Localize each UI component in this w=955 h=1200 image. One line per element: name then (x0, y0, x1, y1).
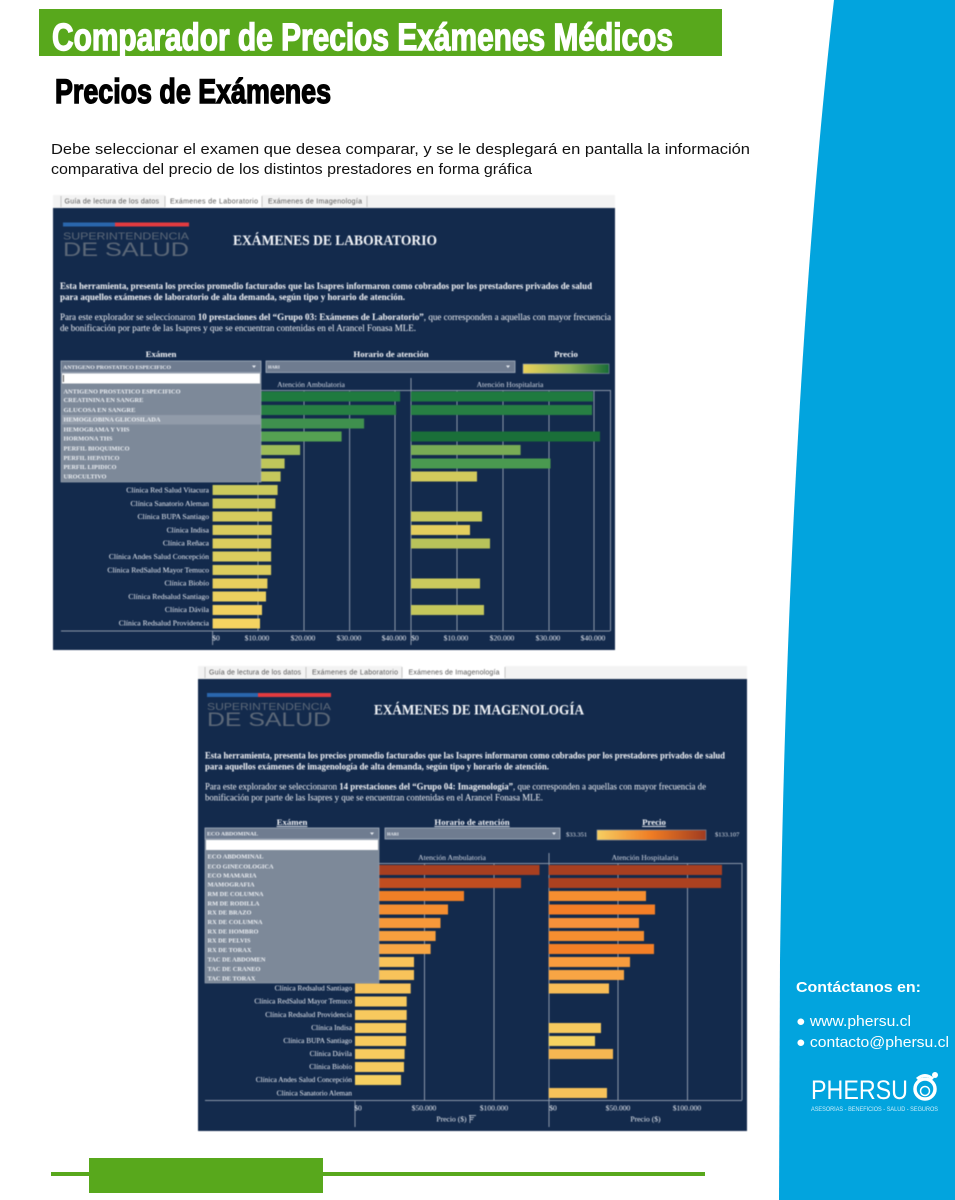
title banner: Comparador de Precios Exámenes Médicos (52, 17, 673, 59)
provider labels: Clínica Indisa (167, 526, 210, 534)
axis labels: $0 (411, 634, 419, 642)
axis labels: $30.000 (337, 634, 362, 642)
examen dropdown: RX DE HOMBRO (208, 928, 258, 936)
examen dropdown: HORMONA THS (64, 436, 113, 442)
description text: Esta herramienta, presenta los precios promedio facturados que las Isapres informaron como cobrados por los prestadores privados de salud (60, 281, 592, 291)
tabs: imagenología dashboard: Exámenes de Imagenología (408, 670, 500, 676)
logo: PHERSU: PHERSU (811, 1075, 908, 1105)
horario selector: HARI (268, 364, 280, 370)
icon: sort marker (469, 1115, 476, 1123)
provider labels: Clínica Redsalud Santiago (128, 592, 209, 601)
provider labels (107, 486, 210, 628)
examen dropdown (205, 828, 379, 983)
provider labels: Clínica Redsalud Providencia (119, 618, 210, 628)
logo: Superintendencia de Salud: SUPERINTENDENCIA (207, 701, 331, 713)
panel: exámenes de laboratorio (53, 195, 615, 650)
precio legend (523, 364, 609, 374)
examen dropdown: TAC DE ABDOMEN (208, 956, 266, 964)
provider labels: Clínica Red Salud Vitacura (126, 486, 210, 494)
examen dropdown: TAC DE CRANEO (208, 966, 260, 973)
axis labels (354, 1104, 701, 1124)
provider labels: Clínica RedSalud Mayor Temuco (107, 566, 209, 574)
provider labels: Clínica Biobío (309, 1062, 352, 1071)
horario selector (266, 361, 515, 372)
horario selector (385, 828, 560, 839)
contact block: ● contacto@phersu.cl (796, 1034, 949, 1051)
provider labels: Clínica BUPA Santiago (138, 512, 209, 521)
axis labels: Precio ($) (436, 1114, 467, 1124)
sidebar: blue curved band (779, 0, 955, 1200)
logo: PHERSU (811, 1072, 938, 1113)
description text (205, 750, 725, 802)
axis labels: $100.000 (673, 1104, 701, 1112)
examen dropdown: ECO MAMARIA (208, 872, 257, 880)
panel: exámenes de imagenología (198, 666, 747, 1131)
description text: bonificación por parte de las Isapres y que se encuentran contenidas en el Arancel Fonasa MLE. (205, 792, 543, 802)
axis labels: $20.000 (291, 634, 316, 642)
description text (60, 281, 611, 333)
column headers: Atención Ambulatoria (277, 380, 345, 389)
description text: Para este explorador se seleccionaron 14 prestaciones del “Grupo 04: Imagenología”, que corresponden a aquellas con mayor frecuencia de (205, 782, 706, 792)
provider labels: Clínica Redsalud Providencia (265, 1010, 353, 1019)
examen dropdown: RM DE COLUMNA (208, 891, 264, 898)
logo: Superintendencia de Salud: DE SALUD (207, 710, 331, 731)
contact block: ● www.phersu.cl (796, 1013, 911, 1030)
horario selector: HARI (387, 832, 399, 836)
description text: Para este explorador se seleccionaron 10 prestaciones del “Grupo 03: Exámenes de Laboratorio”, que corresponden a aquellas con mayor frecuencia (60, 312, 611, 322)
axis labels (212, 634, 606, 642)
axis labels: $30.000 (536, 634, 561, 642)
logo: Superintendencia de Salud (63, 222, 189, 261)
bar chart: atención hospitalaria (549, 865, 722, 1098)
filter headers (146, 349, 578, 359)
examen dropdown: ECO ABDOMINAL (207, 832, 259, 838)
examen dropdown: RX DE BRAZO (208, 910, 252, 916)
axis labels: $40.000 (581, 634, 606, 642)
provider labels: Clínica Dávila (310, 1049, 353, 1058)
provider labels: Clínica Reñaca (163, 538, 210, 548)
examen dropdown: ANTIGENO PROSTATICO ESPECIFICO (63, 366, 171, 371)
examen dropdown: RX DE PELVIS (208, 938, 251, 944)
examen dropdown: PERFIL LIPIDICO (64, 464, 116, 471)
bar chart: atención hospitalaria (411, 392, 600, 615)
precio legend (566, 830, 740, 840)
dashboard title: EXÁMENES DE LABORATORIO (233, 232, 437, 249)
icon: phersu spiral (915, 1072, 938, 1099)
examen dropdown: TAC DE TORAX (208, 976, 256, 982)
provider labels: Clínica Indisa (311, 1023, 353, 1032)
tabs: imagenología dashboard (205, 666, 505, 679)
column headers: Atención Ambulatoria (418, 853, 486, 862)
intro text: comparativa del precio de los distintos prestadores en forma gráfica (51, 162, 533, 178)
description text: de bonificación por parte de las Isapres y que se encuentran contenidas en el Arancel Fonasa MLE. (60, 323, 416, 333)
filter headers: Precio (642, 817, 666, 827)
axis labels: $20.000 (490, 634, 515, 642)
examen dropdown: RX DE COLUMNA (208, 919, 263, 926)
axis labels: $50.000 (412, 1104, 437, 1112)
provider labels: Clínica RedSalud Mayor Temuco (254, 996, 352, 1006)
axis labels: $100.000 (480, 1104, 508, 1112)
axis labels: $0 (549, 1104, 557, 1112)
examen dropdown: RM DE RODILLA (208, 900, 260, 908)
provider labels: Clínica BUPA Santiago (283, 1036, 352, 1045)
provider labels (254, 984, 353, 1098)
examen dropdown: ECO ABDOMINAL (208, 854, 264, 860)
axis labels: $40.000 (382, 634, 407, 642)
axis labels: $0 (354, 1104, 362, 1112)
description text: para aquellos exámenes de laboratorio de alta demanda, según tipo y horario de atención. (60, 292, 405, 302)
axis labels: $50.000 (606, 1104, 631, 1112)
provider labels: Clínica Sanatorio Aleman (277, 1088, 352, 1098)
examen dropdown: MAMOGRAFIA (208, 882, 255, 888)
column headers (418, 853, 679, 862)
provider labels: Clínica Redsalud Santiago (275, 984, 352, 992)
axis labels: $0 (212, 634, 220, 642)
description text: Esta herramienta, presenta los precios promedio facturados que las Isapres informaron como cobrados por los prestadores privados de salud (205, 750, 725, 760)
examen dropdown: CREATININA EN SANGRE (64, 397, 144, 404)
heading: Precios de Exámenes: Precios de Exámenes (55, 73, 331, 111)
tabs: laboratorio dashboard: Exámenes de Imagenología (268, 198, 362, 206)
provider labels: Clínica Dávila (165, 605, 210, 614)
examen dropdown: UROCULTIVO (64, 474, 106, 480)
examen dropdown: ANTIGENO PROSTATICO ESPECIFICO (64, 388, 180, 396)
tabs: laboratorio dashboard: Exámenes de Laboratorio (170, 198, 258, 206)
precio legend: $133.107 (715, 832, 740, 838)
tabs: imagenología dashboard: Guía de lectura de los datos (209, 670, 302, 676)
examen dropdown: HEMOGRAMA Y VHS (64, 426, 130, 434)
filter headers: Precio (554, 349, 578, 359)
intro text (51, 142, 750, 178)
precio legend: $33.351 (566, 832, 587, 838)
logo: Superintendencia de Salud: DE SALUD (63, 240, 189, 261)
filter headers: Exámen (277, 817, 307, 827)
examen dropdown (61, 361, 261, 482)
provider labels: Clínica Andes Salud Concepción (109, 552, 209, 561)
grid (205, 853, 742, 1127)
filter headers: Horario de atención (434, 817, 510, 827)
dashboard title: EXÁMENES DE IMAGENOLOGÍA (374, 702, 584, 718)
provider labels: Clínica Sanatorio Aleman (131, 499, 209, 508)
contact block (796, 979, 949, 1051)
examen dropdown: GLUCOSA EN SANGRE (64, 407, 136, 414)
tabs: laboratorio dashboard (61, 195, 367, 208)
examen dropdown: PERFIL HEPATICO (64, 455, 120, 462)
bar chart: atención ambulatoria (355, 865, 540, 1085)
tabs: imagenología dashboard: Exámenes de Laboratorio (312, 670, 398, 676)
axis labels: Precio ($) (630, 1114, 661, 1124)
column headers: Atención Hospitalaria (612, 853, 679, 862)
examen dropdown: PERFIL BIOQUIMICO (64, 446, 130, 452)
column headers (277, 380, 544, 389)
examen dropdown: ECO GINECOLOGICA (208, 864, 274, 870)
provider labels: Clínica Biobío (164, 578, 209, 588)
tabs: laboratorio dashboard: Guía de lectura de los datos (64, 198, 160, 206)
filter headers: Exámen (146, 349, 176, 359)
column headers: Atención Hospitalaria (477, 380, 544, 389)
intro text: Debe seleccionar el examen que desea comparar, y se le desplegará en pantalla la información (51, 142, 750, 158)
axis labels: $10.000 (245, 634, 270, 642)
logo: Superintendencia de Salud (207, 693, 331, 731)
description text: para aquellos exámenes de imagenología de alta demanda, según tipo y horario de atención. (205, 762, 549, 772)
grid (61, 378, 610, 645)
filter headers (277, 817, 666, 827)
contact block: Contáctanos en: (796, 979, 921, 996)
filter headers: Horario de atención (353, 349, 429, 359)
logo: Superintendencia de Salud: SUPERINTENDENCIA (63, 230, 189, 242)
provider labels: Clínica Andes Salud Concepción (256, 1075, 352, 1084)
examen dropdown: HEMOGLOBINA GLICOSILADA (64, 416, 161, 424)
examen dropdown: RX DE TORAX (208, 947, 252, 954)
footer: green line and box (51, 1158, 705, 1193)
bar chart: atención ambulatoria (213, 392, 400, 628)
logo: PHERSU: ASESORÍAS - BENEFICIOS - SALUD - SEGUROS (811, 1106, 938, 1113)
axis labels: $10.000 (444, 634, 469, 642)
